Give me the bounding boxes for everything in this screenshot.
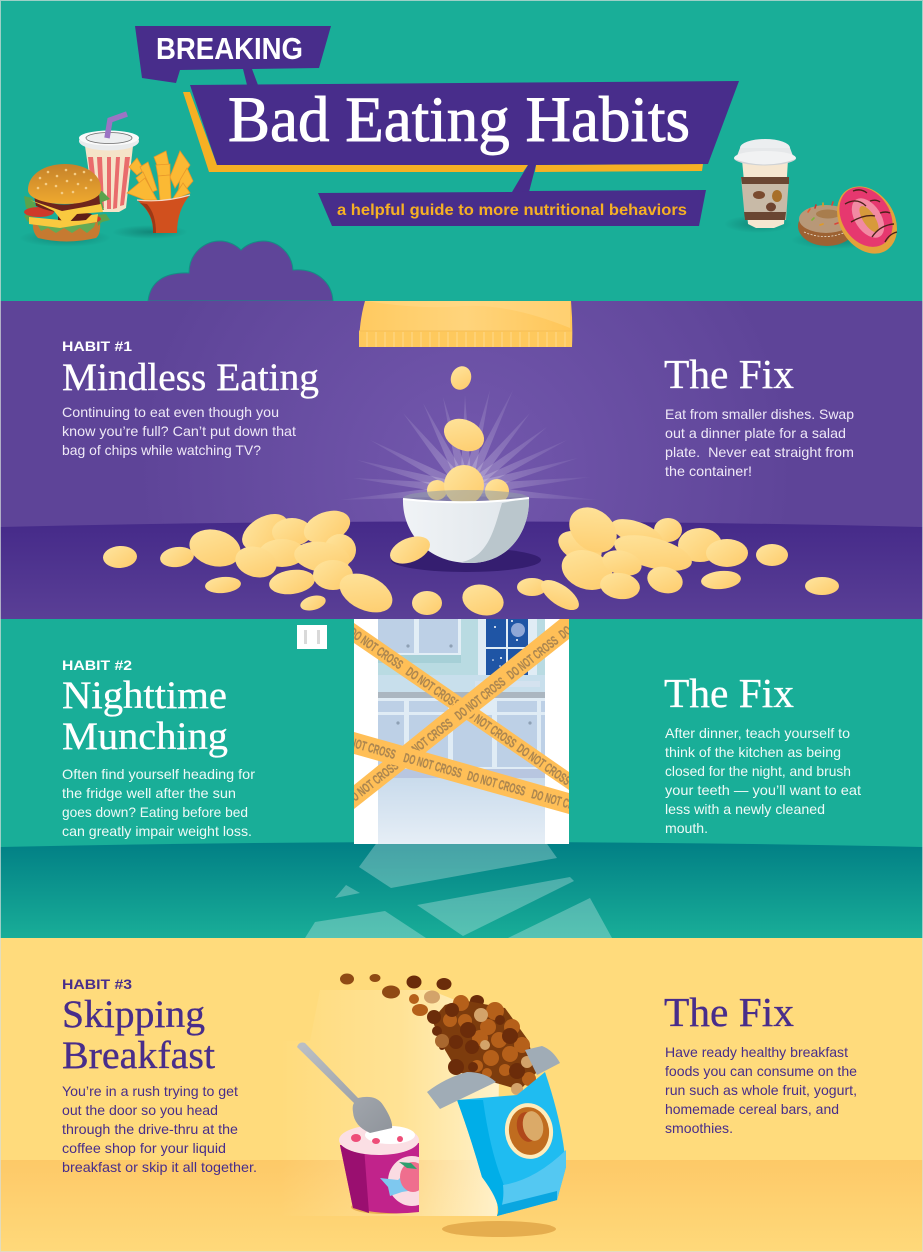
text: fix 2: closed for the night, and brush: [665, 763, 851, 779]
text: habit 2: HABIT #2: [62, 657, 132, 673]
text: habit 1: Continuing to eat even though you: [62, 404, 279, 420]
caution tapes: DO NOT CROSS: [397, 715, 456, 765]
upper cheese: [30, 200, 103, 226]
caution tapes: DO NOT CROSS: [460, 703, 520, 751]
cereal bag: [427, 1046, 566, 1237]
text: fix 3: Have ready healthy breakfast: [665, 1044, 848, 1060]
text: habit 3: out the door so you head: [62, 1102, 218, 1118]
text: habit 3: Breakfast: [62, 1034, 215, 1077]
upper cabinets: [378, 619, 461, 663]
text: habit 1: HABIT #1: [62, 338, 132, 354]
text: habit 1: [62, 338, 319, 458]
text: fix 1: the container!: [665, 463, 752, 479]
night window: [478, 619, 537, 675]
panel: habit 2 nighttime munching: [0, 593, 923, 939]
caution tapes: DO NOT CROSS: [504, 633, 561, 682]
caution tapes: DO NOT CROSS: [402, 750, 464, 781]
text: habit 2: [62, 657, 255, 839]
text: fix 2: The Fix: [664, 670, 794, 716]
tomato: [24, 207, 54, 217]
section: header: [19, 26, 909, 301]
caution tapes: DO NOT CROSS: [514, 741, 574, 788]
caution tapes: DO NOT CROSS: [335, 731, 398, 762]
banner: breaking: [135, 26, 331, 85]
floor: [0, 842, 923, 939]
top bun: [28, 164, 101, 204]
floor: [0, 1160, 923, 1252]
text: habit 2: the fridge well after the sun: [62, 785, 236, 801]
banner: subtitle: a helpful guide to more nutritional behaviors: [337, 202, 687, 219]
text: fix 1: Eat from smaller dishes. Swap: [665, 406, 854, 422]
yogurt cup and spoon: [297, 1042, 419, 1214]
text: habit 1: bag of chips while watching TV?: [62, 442, 261, 458]
banner: subtitle: [318, 190, 706, 226]
light reflections on floor: [305, 841, 612, 938]
caution tapes: DO NOT CROSS: [343, 758, 401, 808]
text: habit 2: Munching: [62, 715, 228, 758]
counter and lower cabinets: [378, 675, 545, 844]
panel: habit 1 mindless eating: [0, 301, 923, 620]
caution tapes: DO NOT CROSS: [452, 674, 508, 723]
text: habit 1: Mindless Eating: [62, 356, 319, 399]
spilled chips left: [102, 505, 507, 620]
text: habit 3: Skipping: [62, 993, 205, 1036]
chips in the air and bowl: [427, 363, 509, 505]
text: habit 3: You’re in a rush trying to get: [62, 1083, 238, 1099]
text: habit 2: goes down? Eating before bed: [62, 804, 248, 820]
text: fix 2: less with a newly cleaned: [665, 801, 825, 817]
caution tapes: DO NOT CROSS: [530, 786, 592, 817]
caution tapes: DO NOT CROSS: [556, 593, 613, 642]
text: fix 1: The Fix: [664, 351, 794, 397]
purple cloud: [148, 241, 333, 301]
icon: donuts: [791, 175, 909, 265]
banner: main title: Bad Eating Habits: [228, 84, 690, 156]
text: fix 2: [664, 670, 861, 836]
caution tapes: DO NOT CROSS: [403, 664, 463, 712]
text: habit 3: [62, 976, 257, 1175]
text: fix 3: [664, 989, 857, 1136]
text: fix 2: After dinner, teach yourself to: [665, 725, 850, 741]
lower cheese: [29, 214, 98, 228]
caution tapes: DO NOT CROSS: [346, 625, 406, 672]
text: habit 3: breakfast or skip it all together.: [62, 1159, 257, 1175]
text: habit 3: coffee shop for your liquid: [62, 1140, 226, 1156]
text: fix 2: think of the kitchen as being: [665, 744, 841, 760]
text: fix 3: foods you can consume on the: [665, 1063, 857, 1079]
text: habit 3: through the drive-thru at the: [62, 1121, 238, 1137]
text: fix 3: The Fix: [664, 989, 794, 1035]
lettuce: [36, 221, 96, 233]
text: fix 1: plate. Never eat straight from: [665, 444, 854, 460]
text: habit 2: Nighttime: [62, 674, 227, 717]
text: fix 1: out a dinner plate for a salad: [665, 425, 846, 441]
icon: soda cup: [79, 114, 139, 212]
light switch: [297, 625, 327, 649]
cereal pieces: [340, 974, 537, 1095]
text: habit 1: know you’re full? Can’t put down that: [62, 423, 296, 439]
panel: habit 3 skipping breakfast: [0, 938, 923, 1252]
text: fix 1: [664, 351, 854, 479]
banner: breaking: BREAKING: [156, 31, 303, 66]
bowl shadow: [391, 548, 541, 572]
icon: coffee cup: [724, 139, 796, 233]
text: fix 2: your teeth — you’ll want to eat: [665, 782, 861, 798]
chip bag opening: [359, 301, 572, 347]
text: habit 2: can greatly impair weight loss.: [62, 823, 252, 839]
spilled chips right: [517, 498, 839, 616]
caution tapes: DO NOT CROSS: [465, 768, 527, 799]
caution tapes: [354, 619, 569, 814]
bowl: [403, 490, 529, 563]
burst rays: [340, 390, 597, 500]
bottom bun: [33, 222, 100, 242]
icon: french fries: [112, 151, 193, 239]
table surface: [0, 522, 923, 619]
icon: burger: [19, 164, 111, 247]
text: fix 3: run such as whole fruit, yogurt,: [665, 1082, 857, 1098]
text: fix 3: homemade cereal bars, and: [665, 1101, 839, 1117]
text: habit 2: Often find yourself heading for: [62, 766, 255, 782]
motion trail: [280, 990, 500, 1216]
banner: main title: [183, 81, 739, 192]
kitchen doorway: [354, 619, 569, 844]
text: fix 2: mouth.: [665, 820, 708, 836]
text: habit 3: HABIT #3: [62, 976, 132, 992]
patty: [34, 194, 100, 213]
text: fix 3: smoothies.: [665, 1120, 733, 1136]
